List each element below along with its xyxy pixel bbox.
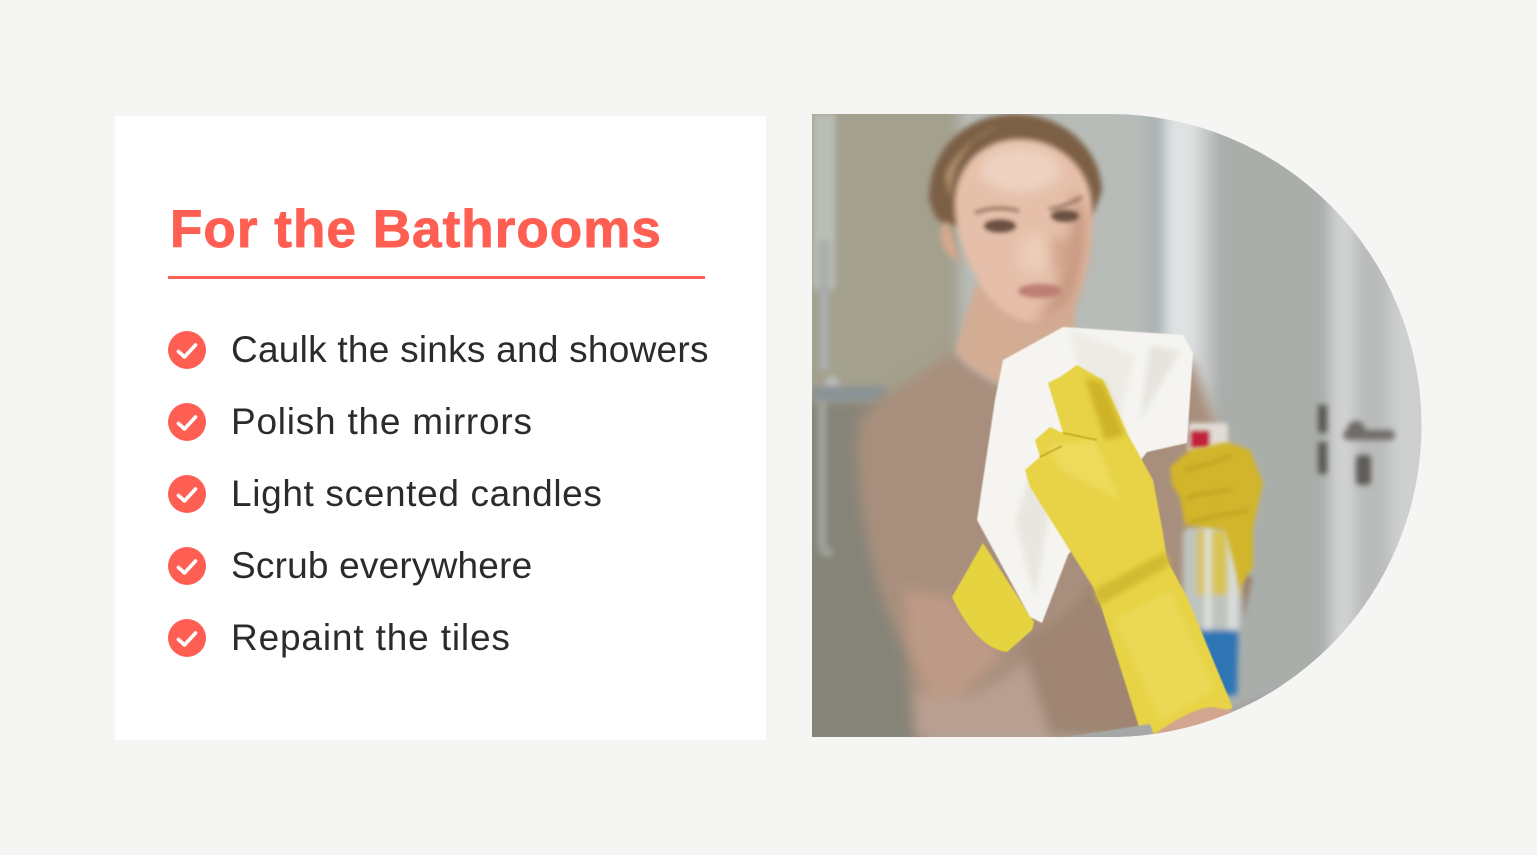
- finger creases: [1040, 433, 1097, 457]
- checklist item: caulk: Caulk the sinks and showers: [231, 329, 709, 370]
- glove shading: [1048, 378, 1215, 720]
- sweater: [857, 340, 1215, 740]
- heading: For the Bathrooms: [170, 200, 662, 259]
- counter edge: [1066, 688, 1278, 737]
- forearm: [1154, 706, 1234, 734]
- heading underline: [168, 276, 705, 279]
- checklist item: mirrors: Polish the mirrors: [231, 401, 533, 442]
- paper towel: [977, 327, 1193, 623]
- hair: [929, 114, 1102, 225]
- checklist item: scrub: Scrub everywhere: [231, 545, 532, 586]
- front glove: [1025, 365, 1233, 735]
- neck and face: [941, 139, 1092, 384]
- panel: checklist card: [115, 116, 766, 740]
- photo: woman cleaning with yellow gloves, D-shaped crop: [812, 114, 1422, 737]
- background wall: [812, 114, 1422, 737]
- checklist item: candles: Light scented candles: [231, 473, 603, 514]
- spray bottle trigger cap: [1188, 423, 1228, 453]
- face shading: [980, 148, 1087, 322]
- facial features: [975, 197, 1082, 298]
- spray bottle: [1183, 525, 1253, 695]
- shower fixtures on the left: [812, 114, 887, 552]
- checklist item: tiles: Repaint the tiles: [231, 617, 511, 658]
- door handle: [1318, 405, 1395, 485]
- far glove holding bottle: [1170, 442, 1263, 587]
- towel folds: [1015, 330, 1180, 600]
- far glove cuff: [952, 543, 1034, 652]
